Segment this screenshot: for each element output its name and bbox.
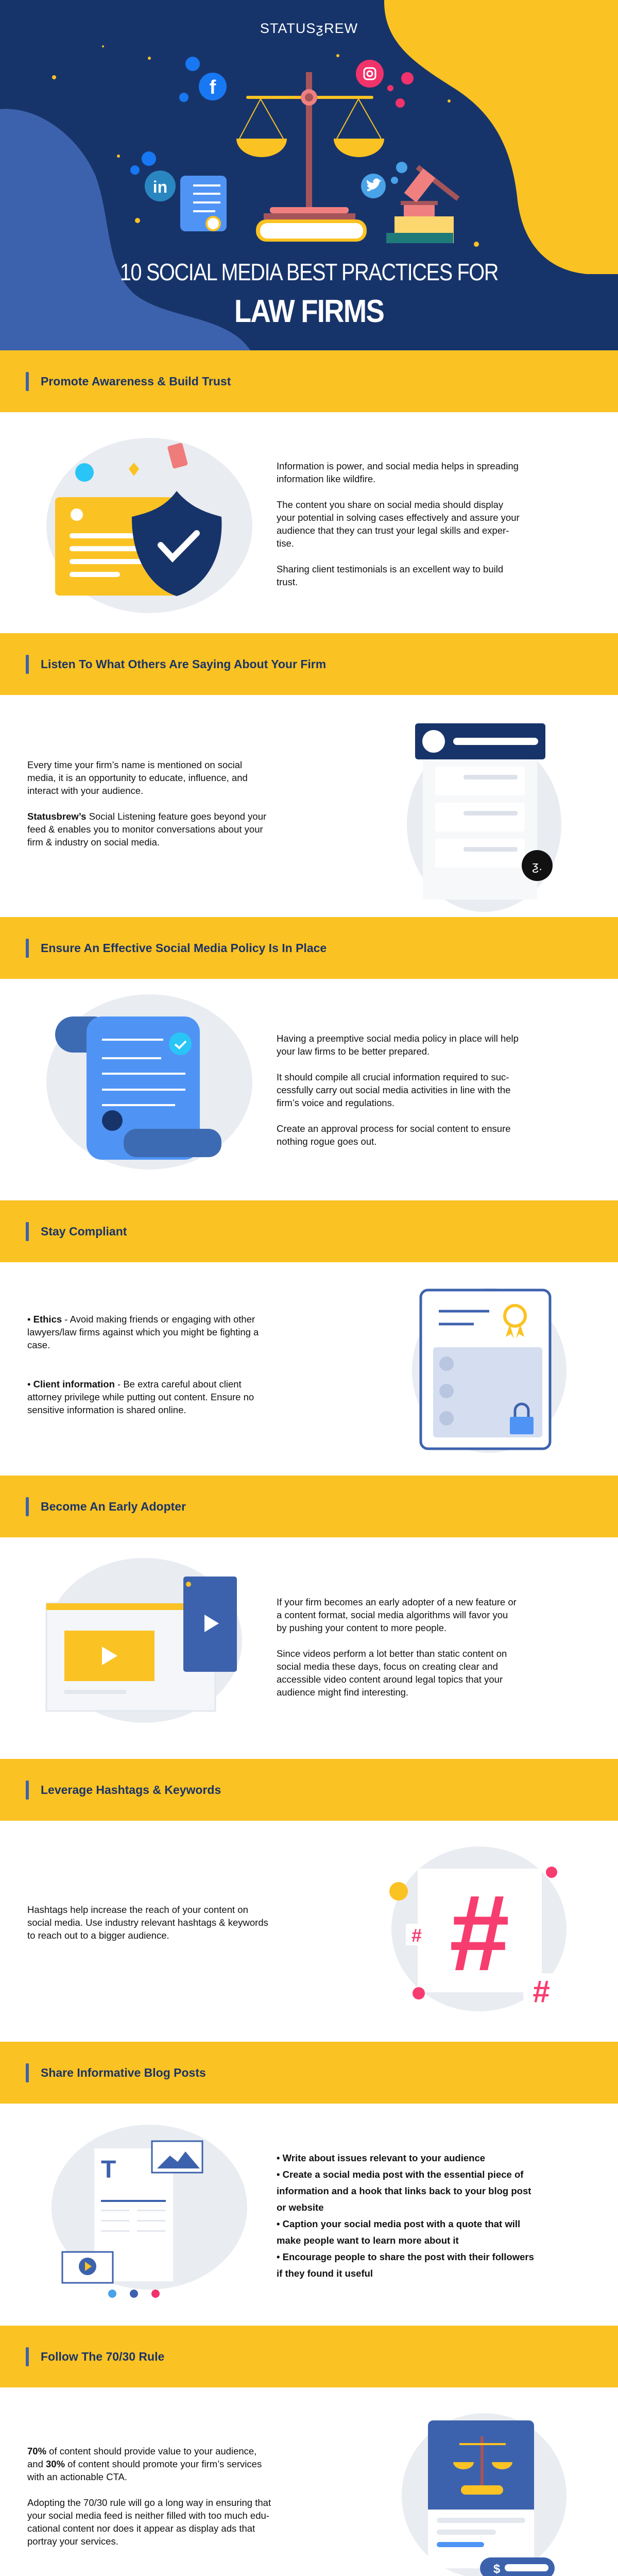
illustration: policy document — [46, 994, 252, 1170]
illustration: scales of justice with social icons: in — [153, 178, 167, 196]
header 1 — [0, 350, 618, 412]
text: 70/30 rule: your social media feed is neither filled with too much edu- — [27, 2510, 269, 2521]
text: blog bullets: • Encourage people to share the post with their followers — [277, 2251, 534, 2262]
header 8 — [0, 2326, 618, 2387]
text: listen — [27, 759, 266, 848]
text: promote awareness: tise. — [277, 538, 294, 549]
header 4 — [0, 1200, 618, 1262]
text: promote awareness: your potential in solving cases effectively and assure your — [277, 512, 520, 523]
text: blog bullets: or website — [277, 2202, 323, 2213]
text: blog bullets: if they found it useful — [277, 2268, 373, 2279]
text: early adopter: a content format, social media algorithms will favor you — [277, 1609, 508, 1620]
header 5: Become An Early Adopter — [41, 1500, 186, 1513]
header 5 — [0, 1476, 618, 1537]
text: listen: Every time your firm’s name is mentioned on social — [27, 759, 242, 770]
text: early adopter — [277, 1597, 517, 1698]
text: hashtags: to reach out to a bigger audience. — [27, 1930, 169, 1941]
text: early adopter: accessible video content around legal topics that your — [277, 1674, 503, 1685]
text: hashtags — [27, 1904, 268, 1941]
header 2 — [0, 633, 618, 695]
text: policy: It should compile all crucial information required to suc- — [277, 1072, 509, 1082]
text: promote awareness: information like wildfire. — [277, 473, 375, 484]
text: hashtags: Hashtags help increase the reach of your content on — [27, 1904, 248, 1915]
text: 70/30 rule: and 30% of content should promote your firm’s services — [27, 2459, 262, 2469]
text: hashtags: social media. Use industry relevant hashtags & keywords — [27, 1917, 268, 1928]
illustration: hashtag — [389, 1846, 566, 2011]
text: compliance: • Ethics - Avoid making friends or engaging with other — [27, 1314, 255, 1325]
text: 70/30 rule: Adopting the 70/30 rule will go a long way in ensuring that — [27, 2497, 271, 2508]
text: blog bullets: • Create a social media post with the essential piece of — [277, 2169, 523, 2180]
text: blog bullets — [277, 2153, 534, 2279]
illustration: promotional card: $ — [493, 2562, 501, 2576]
text: blog bullets: • Caption your social media post with a quote that will — [277, 2218, 520, 2229]
text: listen: media, it is an opportunity to educate, influence, and — [27, 772, 248, 783]
text: 70/30 rule: portray your services. — [27, 2536, 118, 2547]
text: 70/30 rule: with an actionable CTA. — [27, 2471, 127, 2482]
text: policy: firm’s voice and regulations. — [277, 1097, 394, 1108]
illustration: shield and card — [46, 438, 252, 613]
text: early adopter: by pushing your content to more people. — [277, 1622, 447, 1633]
text: compliance: attorney privilege while putting out content. Ensure no — [27, 1392, 254, 1402]
illustration: video content — [45, 1558, 242, 1723]
text: compliance: sensitive information is shared online. — [27, 1404, 186, 1415]
illustration: blog post — [52, 2125, 247, 2298]
text: policy: your law firms to be better prepared. — [277, 1046, 430, 1057]
text: compliance: lawyers/law firms against which you might be fighting a — [27, 1327, 259, 1337]
text: early adopter: audience might find interesting. — [277, 1687, 408, 1698]
illustration: social listening app: ƺ. — [532, 859, 542, 873]
text: 70/30 rule: 70% of content should provide value to your audience, — [27, 2446, 256, 2456]
header 1: Promote Awareness & Build Trust — [41, 375, 231, 388]
text: listen: interact with your audience. — [27, 785, 143, 796]
text: compliance: case. — [27, 1340, 50, 1350]
title: 10 SOCIAL MEDIA BEST PRACTICES FOR — [120, 259, 498, 285]
text: blog bullets: • Write about issues relevant to your audience — [277, 2153, 485, 2163]
illustration: promotional card — [402, 2413, 566, 2576]
text: promote awareness: Sharing client testimonials is an excellent way to build — [277, 564, 503, 574]
text: policy: Create an approval process for social content to ensure — [277, 1123, 511, 1134]
text: listen: feed & enables you to monitor conversations about your — [27, 824, 263, 835]
illustration: hashtag: # — [533, 1974, 550, 2009]
text: early adopter: social media these days, focus on creating clear and — [277, 1661, 498, 1672]
illustration: hashtag: # — [411, 1925, 422, 1946]
text: policy — [277, 1033, 519, 1147]
hero banner — [0, 0, 618, 350]
text: promote awareness: trust. — [277, 577, 298, 587]
header 7 — [0, 2042, 618, 2104]
logo: STATUSƺREW — [260, 21, 358, 36]
text: listen: Statusbrew’s Social Listening feature goes beyond your — [27, 811, 266, 822]
text: early adopter: Since videos perform a lot better than static content on — [277, 1648, 507, 1659]
text: 70/30 rule: cational content nor does it appear as display ads that — [27, 2523, 255, 2534]
title emphasis: LAW FIRMS — [234, 294, 384, 329]
text: promote awareness: The content you share on social media should display — [277, 499, 503, 510]
text: early adopter: If your firm becomes an early adopter of a new feature or — [277, 1597, 517, 1607]
text: compliance: • Client information - Be extra careful about client — [27, 1379, 242, 1389]
header 3 — [0, 917, 618, 979]
header 2: Listen To What Others Are Saying About Your Firm — [41, 657, 326, 671]
header 7: Share Informative Blog Posts — [41, 2066, 206, 2079]
text: promote awareness — [277, 461, 520, 587]
text: 70/30 rule — [27, 2446, 271, 2547]
text: promote awareness: Information is power, and social media helps in spreading — [277, 461, 519, 471]
header 4: Stay Compliant — [41, 1225, 127, 1238]
illustration: social listening app — [407, 723, 561, 912]
header 3: Ensure An Effective Social Media Policy Is In Place — [41, 941, 327, 955]
text: policy: cessfully carry out social media activities in line with the — [277, 1084, 510, 1095]
illustration: hashtag: # — [450, 1872, 509, 1993]
header 6: Leverage Hashtags & Keywords — [41, 1783, 221, 1797]
text: policy: Having a preemptive social media policy in place will help — [277, 1033, 519, 1044]
illustration: blog post: T — [101, 2156, 116, 2183]
header 6 — [0, 1759, 618, 1821]
text: policy: nothing rogue goes out. — [277, 1136, 376, 1147]
text: blog bullets: make people want to learn more about it — [277, 2235, 459, 2246]
text: compliance — [27, 1314, 259, 1415]
illustration: compliance certificate — [412, 1288, 566, 1453]
text: promote awareness: audience that they can trust your legal skills and exper- — [277, 525, 509, 536]
illustration: scales of justice with social icons: f — [210, 77, 216, 98]
text: listen: firm & industry on social media. — [27, 837, 160, 848]
text: blog bullets: information and a hook that links back to your blog post — [277, 2185, 531, 2196]
illustration: scales of justice with social icons — [130, 57, 459, 243]
header 8: Follow The 70/30 Rule — [41, 2350, 164, 2363]
